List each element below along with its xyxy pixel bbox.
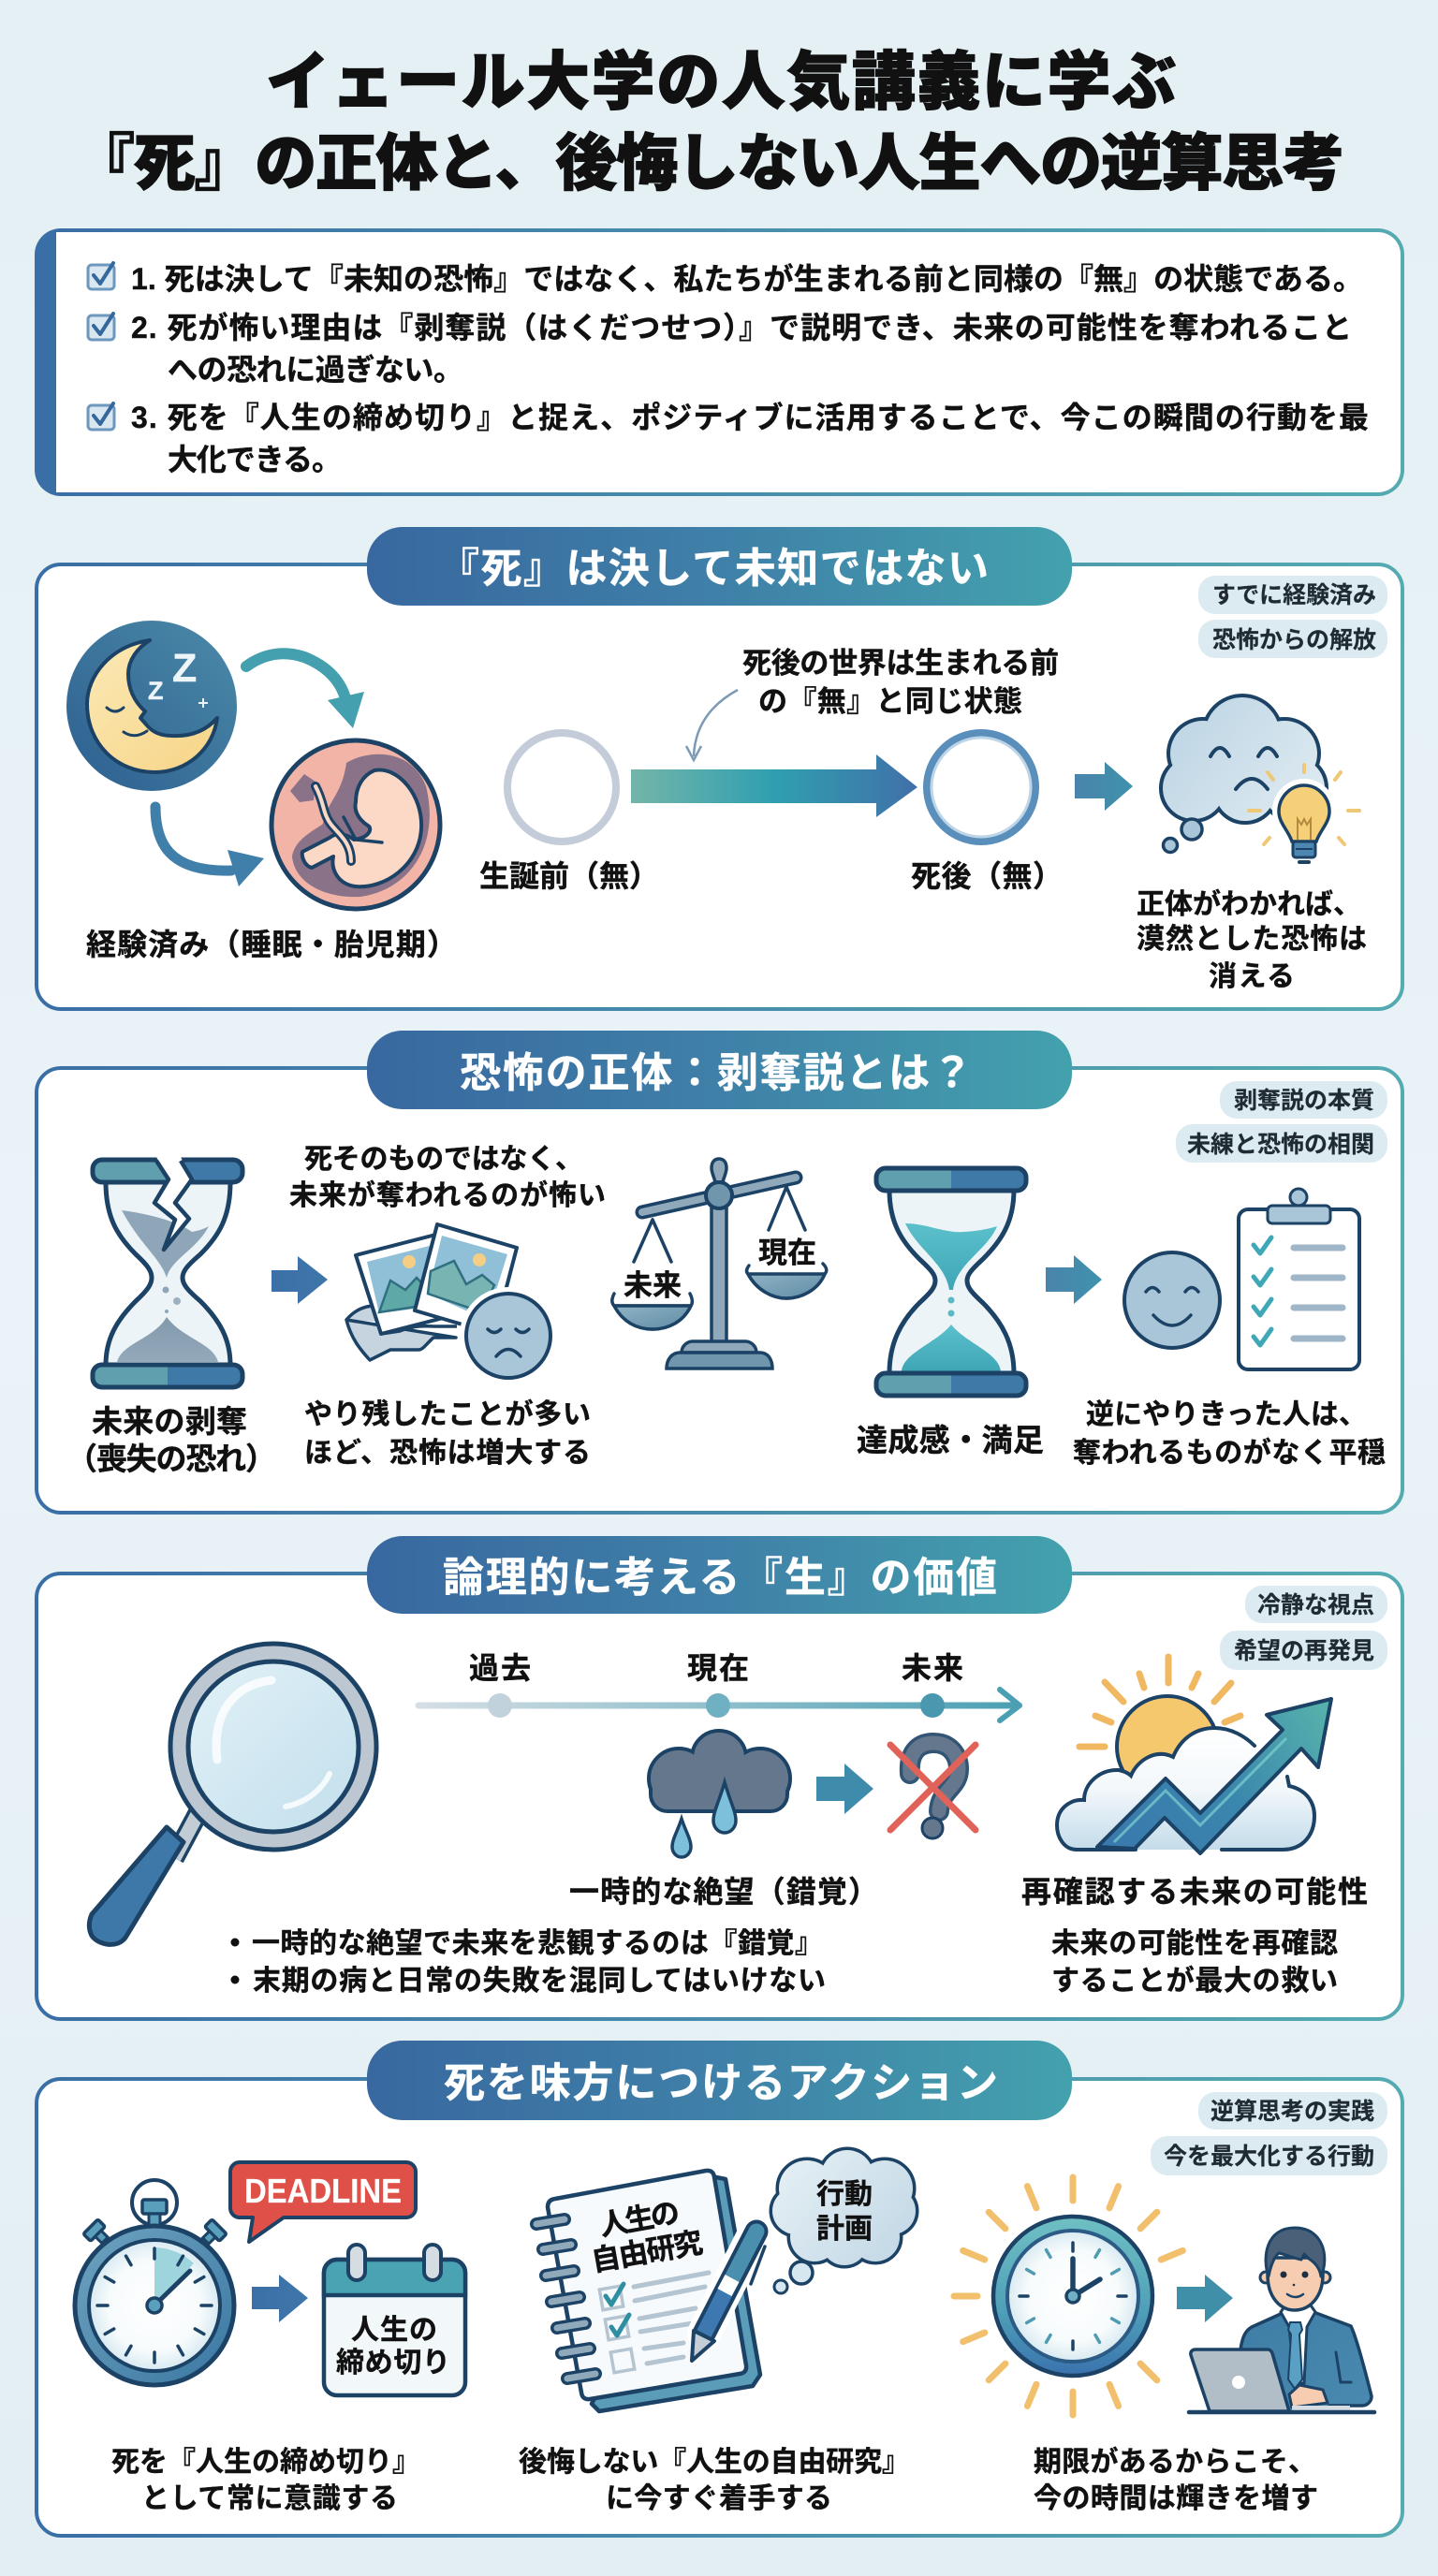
tag: rediscovery of hope xyxy=(1220,1631,1387,1670)
text: loss of future: （喪失の恐れ） xyxy=(66,1442,276,1476)
text: always conscious: として常に意識する xyxy=(141,2483,398,2514)
text: point 3 xyxy=(131,401,1369,476)
text: greatest salvation: 未来の可能性を再確認 xyxy=(1051,1928,1338,1959)
text: point 2 xyxy=(131,311,1352,387)
panel: section 1 xyxy=(37,527,1402,1009)
icon: worried cloud xyxy=(1163,697,1325,852)
heading: section 1 xyxy=(367,527,1072,606)
tag: rediscovery of hope: 希望の再発見 xyxy=(1234,1638,1374,1664)
tag: release from fear: 恐怖からの解放 xyxy=(1212,627,1376,653)
tag: practice xyxy=(1198,2092,1387,2130)
chart: timeline xyxy=(418,1651,1020,1720)
text: loss of future: 未来の剥奪 xyxy=(92,1404,247,1439)
icon: thought cloud: 行動 xyxy=(816,2179,873,2210)
tag: calm view: 冷静な視点 xyxy=(1257,1592,1374,1618)
icon: smiling face xyxy=(1124,1252,1220,1348)
callout: DEADLINE xyxy=(230,2162,416,2242)
title xyxy=(73,47,1344,198)
arrow: moon to fetus (blue) xyxy=(155,807,264,886)
text: point 2: への恐れに過ぎない。 xyxy=(168,353,463,387)
icon: calendar xyxy=(324,2245,465,2395)
arrow: moon to fetus (teal) xyxy=(246,653,364,728)
arrow: birth to death xyxy=(631,754,917,817)
icon: glowing clock xyxy=(954,2177,1182,2415)
icon: checkbox 1 xyxy=(88,263,114,289)
icon: empty circle before birth xyxy=(507,733,616,842)
panel: section 4 xyxy=(37,2041,1402,2536)
tag: practice: 逆算思考の実践 xyxy=(1211,2099,1374,2125)
arrow: to smiley xyxy=(1046,1255,1102,1304)
text: time shines: 今の時間は輝きを増す xyxy=(1034,2483,1318,2514)
icon: balance scale xyxy=(612,1159,827,1368)
icon: thought cloud xyxy=(772,2150,916,2293)
panel: section 3 xyxy=(37,1536,1402,2019)
icon: full hourglass xyxy=(876,1168,1026,1396)
text: point 3: 3. 死を『人生の締め切り』と捉え、ポジティブに活用することで、今この瞬間の行動を最 xyxy=(131,401,1369,434)
tag: already experienced: すでに経験済み xyxy=(1212,582,1376,608)
text: bullets: 末期の病と日常の失敗を混同してはいけない xyxy=(253,1966,826,1997)
title: 『死』の正体と、後悔しない人生への逆算思考 xyxy=(73,128,1344,198)
title: イェール大学の人気講義に学ぶ xyxy=(266,47,1176,118)
arrow: to question mark xyxy=(816,1764,873,1814)
text: greatest salvation: することが最大の救い xyxy=(1051,1965,1338,1997)
label: before birth: 生誕前（無） xyxy=(479,859,659,893)
icon: sleeping moon: Z xyxy=(148,677,163,705)
text: truth dispels fear xyxy=(1137,888,1367,992)
panel: section 2 xyxy=(37,1031,1402,1513)
tag: calm view xyxy=(1245,1586,1387,1623)
text: truth dispels fear: 漠然とした恐怖は xyxy=(1137,924,1367,955)
icon: photos and sad face xyxy=(346,1224,557,1384)
tag: essence: 剥奪説の本質 xyxy=(1234,1088,1374,1114)
chart: timeline: 現在 xyxy=(687,1651,749,1685)
tag: release from fear xyxy=(1198,620,1387,658)
icon: sleeping moon: Z xyxy=(172,646,197,691)
tag: essence xyxy=(1220,1081,1387,1119)
text: greatest salvation xyxy=(1051,1928,1338,1997)
heading: section 4: 死を味方につけるアクション xyxy=(444,2060,998,2106)
icon: broken hourglass xyxy=(93,1157,242,1387)
icon: thought cloud: 計画 xyxy=(816,2214,873,2245)
icon: empty circle after death xyxy=(927,733,1035,842)
text: bullets xyxy=(230,1928,826,1997)
arrow: to regret xyxy=(271,1256,328,1304)
text: unfinished things xyxy=(304,1398,591,1469)
icon: stopwatch xyxy=(75,2180,234,2385)
text: start now: に今すぐ着手する xyxy=(606,2483,832,2514)
text: fear of losing future: 死そのものではなく、 xyxy=(304,1144,583,1175)
tag: maximize now xyxy=(1151,2136,1387,2175)
heading: section 2 xyxy=(367,1031,1072,1109)
icon: fetus in womb xyxy=(271,740,440,909)
callout: DEADLINE: DEADLINE xyxy=(244,2172,402,2210)
callout: after death equals before birth xyxy=(686,647,1059,760)
tag: maximize now: 今を最大化する行動 xyxy=(1164,2144,1374,2170)
text: always conscious: 死を『人生の締め切り』 xyxy=(111,2447,420,2478)
icon: notebook and pen: 自由研究 xyxy=(589,2226,705,2277)
icon: notebook and pen xyxy=(536,2171,765,2411)
text: time shines: 期限があるからこそ、 xyxy=(1034,2446,1316,2478)
icon: magnifying glass xyxy=(89,1644,376,1944)
heading: section 2: 恐怖の正体：剥奪説とは？ xyxy=(460,1050,973,1096)
label: temporary despair: 一時的な絶望（錯覚） xyxy=(569,1875,878,1909)
text: start now: 後悔しない『人生の自由研究』 xyxy=(519,2447,910,2478)
icon: checkbox 3 xyxy=(88,403,114,430)
text: time shines xyxy=(1034,2446,1318,2514)
tag: already experienced xyxy=(1198,576,1387,614)
label: present: 現在 xyxy=(758,1237,816,1269)
text: start now xyxy=(519,2447,910,2514)
text: truth dispels fear: 正体がわかれば、 xyxy=(1137,888,1361,920)
chart: timeline: 未来 xyxy=(902,1651,963,1685)
text: point 1: 1. 死は決して『未知の恐怖』ではなく、私たちが生まれる前と同様の『無』の状態である。 xyxy=(131,262,1363,296)
text: point 3: 大化できる。 xyxy=(168,443,342,476)
icon: checklist clipboard xyxy=(1239,1189,1359,1369)
icon: checkbox 2 xyxy=(88,314,114,340)
icon: light bulb xyxy=(1249,765,1359,862)
text: point 2: 2. 死が怖い理由は『剥奪説（はくだつせつ）』で説明でき、未来の可能性を奪われること xyxy=(131,311,1352,344)
text: loss of future xyxy=(66,1404,276,1476)
callout: after death equals before birth: 死後の世界は生まれる前 xyxy=(742,647,1059,680)
label: future: 未来 xyxy=(624,1269,682,1302)
text: unfinished things: やり残したことが多い xyxy=(304,1398,591,1430)
label: after death: 死後（無） xyxy=(911,859,1063,893)
text: fear of losing future: 未来が奪われるのが怖い xyxy=(289,1179,606,1211)
text: always conscious xyxy=(111,2447,420,2514)
icon: calendar: 人生の xyxy=(351,2315,437,2346)
panel: summary xyxy=(35,228,1404,496)
text: fear of losing future xyxy=(289,1144,606,1211)
text: bullets: 一時的な絶望で未来を悲観するのは『錯覚』 xyxy=(252,1928,823,1959)
icon: notebook and pen: 人生の xyxy=(597,2196,682,2242)
arrow: to person xyxy=(1177,2275,1233,2322)
tag: correlation: 未練と恐怖の相関 xyxy=(1187,1132,1374,1158)
chart: timeline: 過去 xyxy=(469,1651,531,1685)
icon: calendar: 締め切り xyxy=(336,2348,450,2378)
icon: rain cloud xyxy=(649,1731,790,1857)
tag: correlation xyxy=(1176,1124,1387,1163)
arrow: to cloud xyxy=(1075,762,1133,811)
icon: businessperson with laptop xyxy=(1189,2228,1374,2412)
label: experienced: 経験済み（睡眠・胎児期） xyxy=(86,928,457,961)
text: truth dispels fear: 消える xyxy=(1209,961,1295,992)
icon: sleeping moon xyxy=(66,621,237,791)
icon: sun, cloud and rising arrow xyxy=(1057,1657,1331,1853)
heading: section 4 xyxy=(367,2041,1072,2120)
icon: crossed question mark xyxy=(890,1743,976,1838)
text: fulfillment: 達成感・満足 xyxy=(857,1423,1044,1457)
arrow: to calendar xyxy=(252,2275,308,2322)
heading: section 1: 『死』は決して未知ではない xyxy=(438,546,989,592)
callout: after death equals before birth: の『無』と同じ状態 xyxy=(758,685,1022,718)
heading: section 3: 論理的に考える『生』の価値 xyxy=(443,1555,997,1601)
text: calm when fulfilled: 奪われるものがなく平穏 xyxy=(1073,1437,1386,1469)
text: unfinished things: ほど、恐怖は増大する xyxy=(304,1438,591,1469)
heading: section 3 xyxy=(367,1536,1072,1614)
label: reconfirmed possibility: 再確認する未来の可能性 xyxy=(1021,1875,1368,1909)
text: calm when fulfilled xyxy=(1073,1399,1386,1469)
text: calm when fulfilled: 逆にやりきった人は、 xyxy=(1086,1399,1367,1430)
